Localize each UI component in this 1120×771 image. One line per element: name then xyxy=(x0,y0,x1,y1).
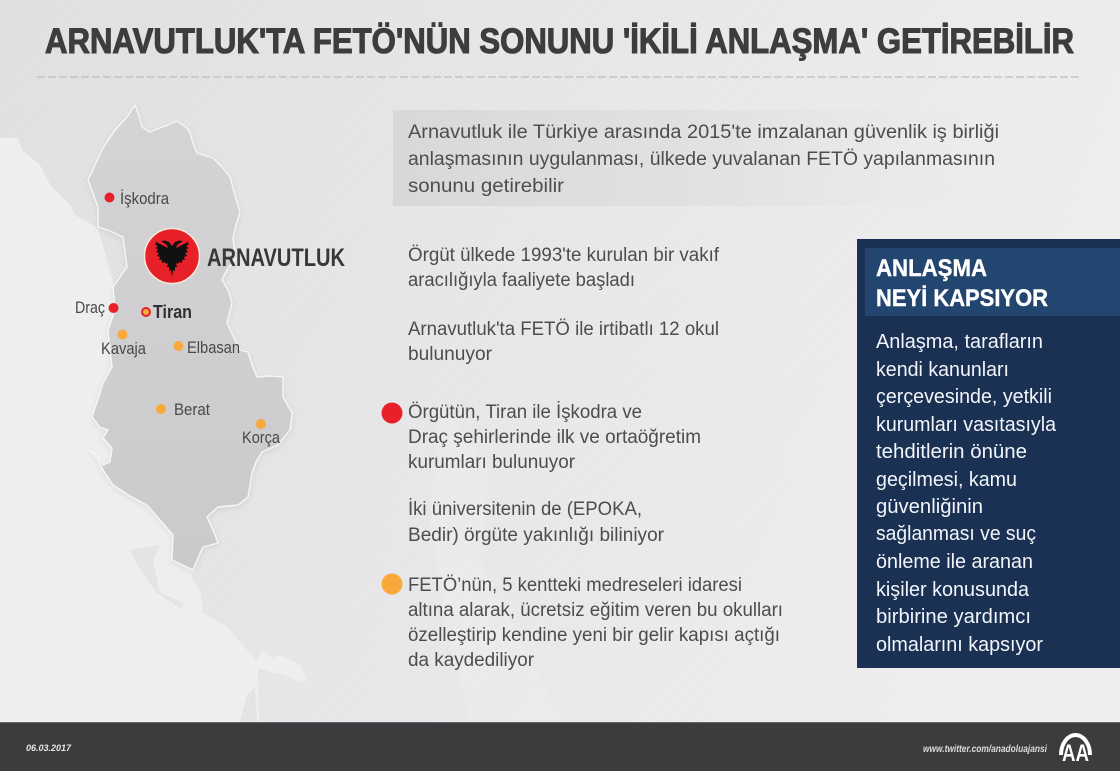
city: İşkodra: İşkodra xyxy=(120,189,169,208)
text: universities: Bedir) örgüte yakınlığı biliniyor xyxy=(408,525,665,546)
city: Tiran: Tiran xyxy=(153,302,192,322)
city: İşkodra xyxy=(104,189,169,208)
panel text: önleme ile aranan xyxy=(876,551,1033,573)
icon: double-headed eagle xyxy=(156,240,188,277)
panel text: tehditlerin önüne xyxy=(876,441,1027,463)
panel heading: NEYİ KAPSIYOR xyxy=(876,285,1048,312)
text: foundation xyxy=(408,245,720,291)
panel text: sağlanması ve suç xyxy=(876,523,1036,545)
panel text: geçilmesi, kamu xyxy=(876,469,1017,491)
label: country name: ARNAVUTLUK xyxy=(207,244,345,272)
panel heading xyxy=(865,248,1120,316)
country shape xyxy=(88,105,292,570)
footer bar xyxy=(0,722,1120,771)
text: schools count xyxy=(408,319,719,365)
intro text block: Arnavutluk ile Türkiye arasında 2015'te imzalanan güvenlik iş birliği xyxy=(408,122,999,143)
text: schools count: bulunuyor xyxy=(408,344,493,365)
panel text: çerçevesinde, yetkili xyxy=(876,386,1052,408)
bullet: orange cities: altına alarak, ücretsiz eğitim veren bu okulları xyxy=(408,600,783,621)
city: Kavaja xyxy=(101,330,146,358)
panel text: olmalarını kapsıyor xyxy=(876,634,1043,656)
bullet: orange cities: FETÖ’nün, 5 kentteki medreseleri idaresi xyxy=(408,575,742,596)
bullet: red cities xyxy=(382,402,701,473)
bullet: red cities: Draç şehirlerinde ilk ve ortaöğretim xyxy=(408,427,701,448)
flag emblem xyxy=(144,228,200,284)
city: Kavaja: Kavaja xyxy=(101,339,146,358)
city: Korça: Korça xyxy=(242,428,280,447)
city: Elbasan: Elbasan xyxy=(187,338,240,357)
date: 06.03.2017 xyxy=(26,743,72,754)
text: schools count: Arnavutluk'ta FETÖ ile irtibatlı 12 okul xyxy=(408,319,719,340)
city: Draç: Draç xyxy=(75,298,105,317)
bullet: orange cities: da kaydediliyor xyxy=(408,650,535,671)
city: Berat: Berat xyxy=(174,400,210,419)
icon: AA logo xyxy=(1061,735,1090,767)
bullet: orange cities: özelleştirip kendine yeni bir gelir kapısı açtığı xyxy=(408,625,780,646)
panel text xyxy=(876,331,1057,656)
intro text block: anlaşmasının uygulanması, ülkede yuvalanan FETÖ yapılanmasının xyxy=(408,149,995,170)
bullet: red cities: Örgütün, Tiran ile İşkodra ve xyxy=(408,402,642,423)
text: universities xyxy=(408,499,665,546)
icon: AA logo: AA xyxy=(1062,740,1089,767)
text: foundation: Örgüt ülkede 1993'te kurulan bir vakıf xyxy=(408,245,720,266)
panel: agreement scope xyxy=(857,239,1120,668)
panel text: kendi kanunları xyxy=(876,359,1009,381)
panel text: Anlaşma, tarafların xyxy=(876,331,1043,353)
city: Berat xyxy=(156,400,210,419)
text: universities: İki üniversitenin de (EPOKA, xyxy=(408,499,642,520)
panel text: güvenliğinin xyxy=(876,496,983,518)
source link: www.twitter.com/anadoluajansi xyxy=(923,743,1048,755)
intro text block xyxy=(393,110,1003,206)
panel text: kişiler konusunda xyxy=(876,579,1030,601)
map of Albania xyxy=(75,105,345,570)
city: Korça xyxy=(242,419,280,447)
panel text: birbirine yardımcı xyxy=(876,606,1031,628)
panel heading: ANLAŞMA xyxy=(876,255,987,282)
intro text block: sonunu getirebilir xyxy=(408,176,565,197)
text: foundation: aracılığıyla faaliyete başladı xyxy=(408,270,635,291)
bullet: red cities: kurumları bulunuyor xyxy=(408,452,576,473)
panel text: kurumları vasıtasıyla xyxy=(876,414,1057,436)
bullet: orange cities xyxy=(382,574,783,671)
